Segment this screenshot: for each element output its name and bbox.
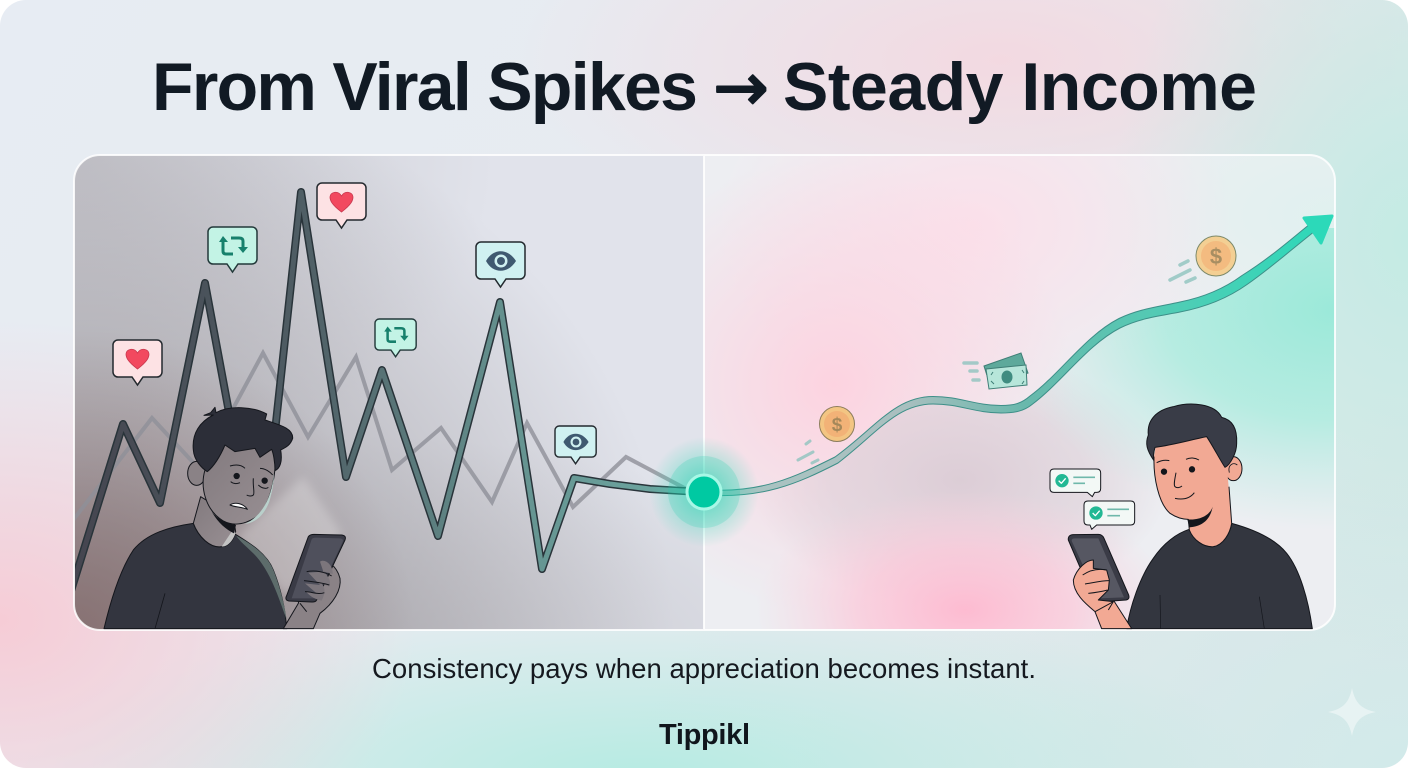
face and neck skin — [1154, 433, 1232, 547]
face outline strokes — [1154, 457, 1232, 547]
fingers — [305, 561, 333, 601]
callout: repost bubble large — [208, 227, 257, 272]
chin shadow — [212, 512, 236, 533]
callout: repost bubble small — [375, 319, 416, 357]
title: Steady Income — [783, 49, 1257, 125]
neck — [193, 497, 236, 547]
hair — [193, 407, 293, 472]
hair — [1147, 404, 1237, 467]
caption: Consistency pays when appreciation becomes instant. — [372, 653, 1036, 684]
figure: happy man with phone — [1050, 404, 1312, 629]
chart: volatile spike line — [70, 192, 700, 594]
message bubble bottom — [1084, 501, 1135, 529]
face — [203, 440, 275, 524]
icon: coin low — [798, 406, 854, 463]
features — [1157, 458, 1199, 499]
shirt — [104, 523, 287, 629]
shirt — [1127, 523, 1312, 629]
shirt highlight — [236, 535, 287, 620]
phone — [1068, 534, 1129, 602]
callout: eye bubble small — [555, 426, 596, 464]
title: From Viral Spikes — [152, 49, 698, 125]
callout: eye bubble large — [476, 242, 525, 287]
chart: faded grey background line — [70, 353, 692, 524]
panel: left background — [74, 155, 704, 630]
jaw shadow — [1187, 507, 1213, 527]
icon: coin high: $ — [1210, 244, 1222, 269]
wrist behind phone — [1093, 600, 1132, 629]
panel: right background — [704, 155, 1335, 630]
icon: coin low: $ — [832, 415, 843, 436]
phone — [286, 534, 345, 602]
figure: stressed man with phone — [104, 407, 345, 629]
hand — [1073, 560, 1113, 612]
panel: area shading under the rising curve — [790, 228, 1335, 629]
title: → — [713, 49, 769, 126]
brand name: Tippikl — [659, 719, 750, 751]
ear — [188, 461, 206, 485]
hand behind phone — [283, 561, 340, 629]
phone light beam — [237, 477, 342, 597]
callout: heart bubble small — [113, 340, 162, 385]
icon: banknote — [964, 353, 1028, 389]
chart: steady rising arrow — [704, 216, 1332, 496]
ear — [1225, 457, 1242, 481]
icon: coin high — [1170, 236, 1236, 282]
icon: sparkle — [1328, 688, 1376, 736]
panel frame — [74, 155, 1335, 630]
message bubble top — [1050, 469, 1101, 497]
centre divider — [703, 156, 705, 629]
callout: heart bubble top — [317, 183, 366, 228]
title — [152, 49, 1257, 126]
eyes and expression — [230, 465, 273, 509]
icon: transition node — [649, 437, 759, 547]
